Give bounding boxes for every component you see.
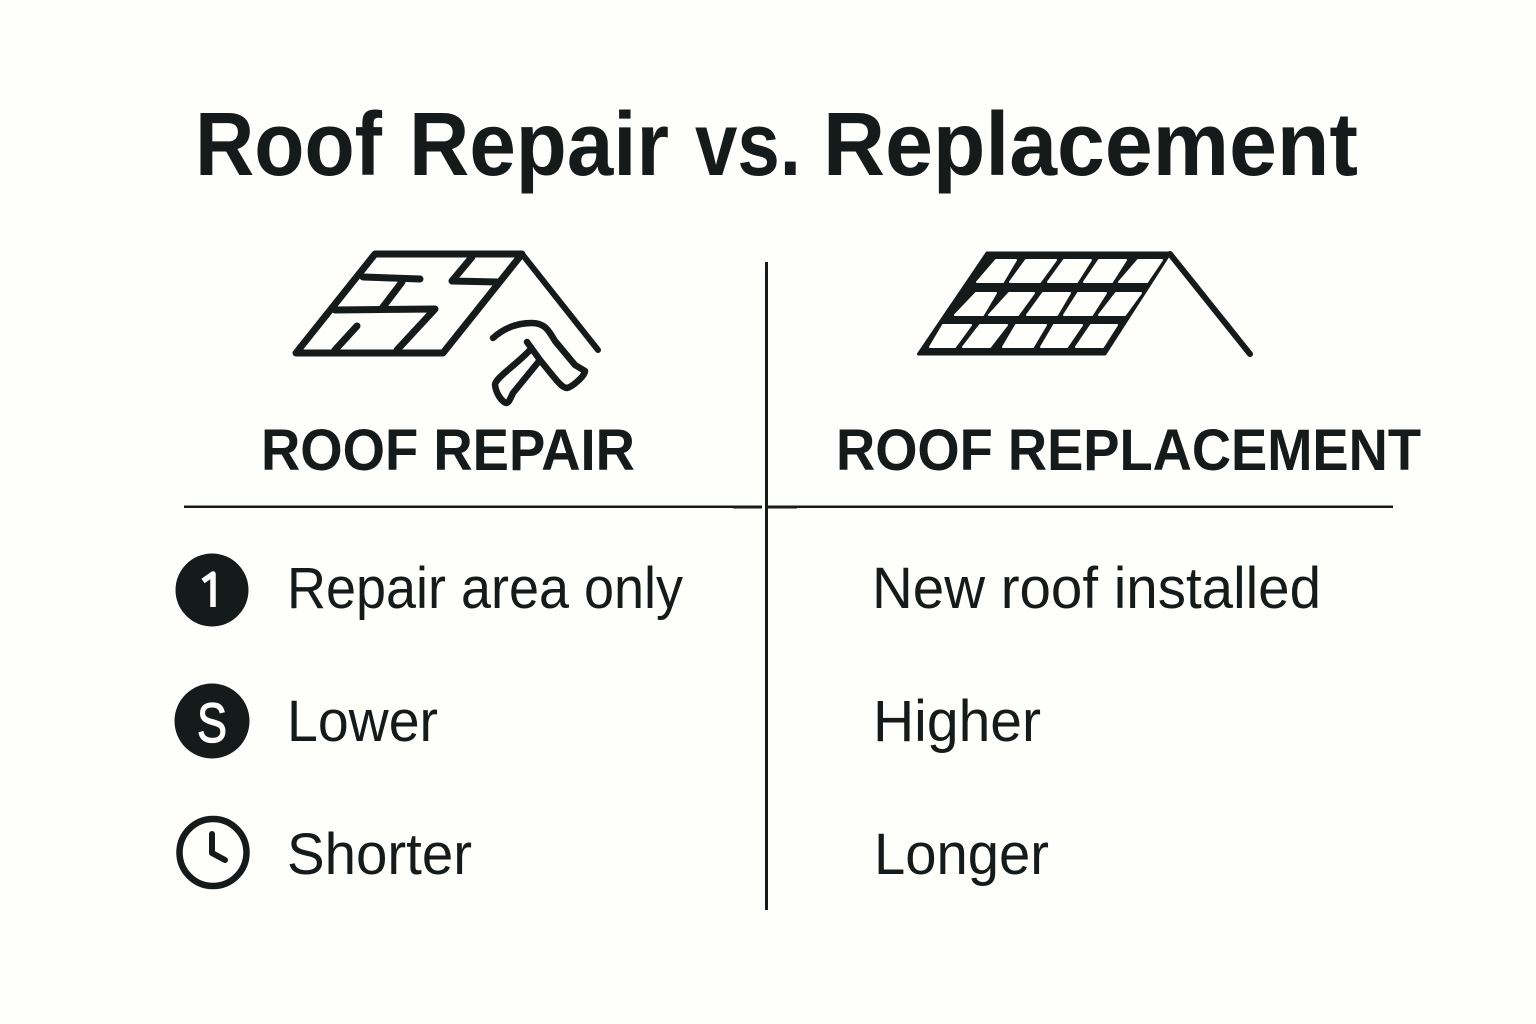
icon: number one (176, 554, 248, 626)
text: new roof installed: New roof installed (872, 556, 1321, 621)
text: higher: Higher (873, 689, 1041, 754)
panel: roof replacement (836, 253, 1421, 887)
roof body (918, 253, 1170, 354)
panel: roof repair (174, 254, 683, 887)
icon: clock (180, 819, 246, 886)
text: repair area only: Repair area only (287, 556, 683, 621)
title (195, 95, 1358, 195)
text: longer: Longer (874, 822, 1049, 887)
roof slope (1170, 254, 1250, 354)
vertical divider (765, 262, 768, 910)
row: time (180, 819, 472, 887)
icon: new shingled roof (918, 253, 1250, 354)
hammer (493, 323, 585, 403)
text: lower: Lower (287, 689, 438, 754)
icon: cost badge: S (197, 691, 227, 754)
title: Repair (409, 95, 669, 195)
title: Roof (195, 95, 383, 195)
shingle cells (930, 260, 1162, 347)
row: scope (176, 554, 683, 626)
horizontal divider (184, 506, 1393, 508)
row: cost (174, 684, 438, 758)
title: Replacement (823, 95, 1358, 195)
icon: damaged roof with hammer (296, 254, 598, 403)
title: vs. (695, 95, 801, 195)
icon: cost badge (174, 684, 250, 758)
heading: roof replacement: ROOF REPLACEMENT (836, 418, 1421, 483)
text: shorter: Shorter (287, 822, 472, 887)
heading: roof repair: ROOF REPAIR (261, 418, 635, 483)
roof outline (296, 254, 598, 353)
